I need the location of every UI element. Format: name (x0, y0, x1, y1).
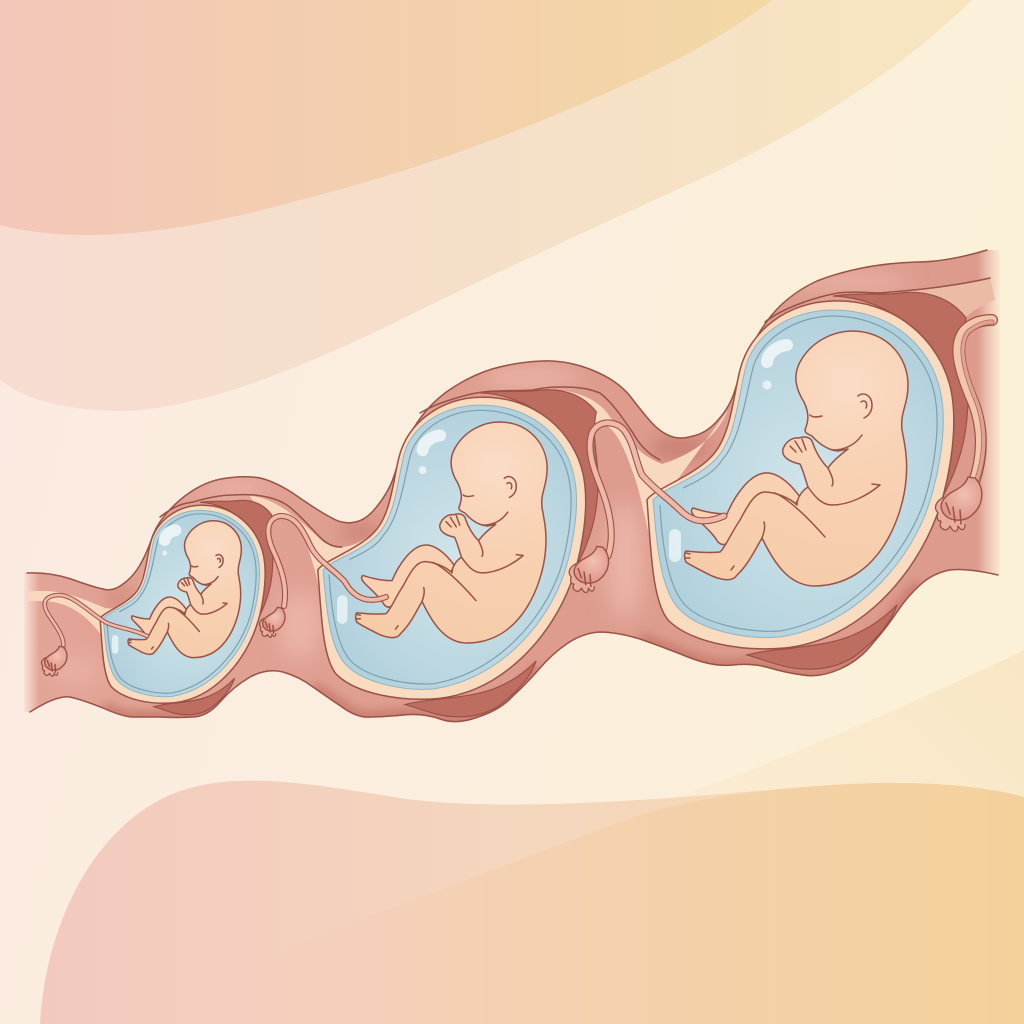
umbilical cord stage 1 to 2 (268, 516, 386, 606)
peach tract: left (27, 558, 150, 650)
placenta stage 3 (935, 477, 982, 531)
umbilical cord left (45, 595, 147, 648)
stage 1 amniotic sac (100, 500, 273, 715)
placenta stage 1 (260, 607, 285, 637)
uterus tissue band (24, 250, 1000, 722)
fetus stage 1 (128, 521, 241, 658)
tissue bottom outline (30, 570, 998, 722)
tissue top outline (27, 250, 987, 590)
umbilical cord stage 2 to 3 (590, 423, 724, 556)
placenta left (42, 646, 67, 676)
stage 2 amniotic sac (318, 390, 598, 717)
placenta stage 2 (569, 546, 609, 593)
inner wall line stage 3 (765, 278, 990, 322)
fetus stage 3 (684, 331, 908, 586)
inner wall line stage 1 (160, 495, 342, 547)
tissue shading (50, 275, 920, 722)
umbilical cord stage 3 right (958, 320, 992, 482)
peach tract: between stage 2 and 3 (520, 390, 728, 560)
top wave dark (0, 0, 772, 235)
bottom right light wave (640, 650, 1024, 1024)
peach tract: between stage 1 and 2 (250, 496, 378, 600)
inner wall line stage 2 (420, 387, 660, 460)
top wave light (0, 0, 972, 411)
fetus stage 2 (356, 422, 547, 643)
bottom inner wave (230, 783, 1024, 1024)
bottom wave (40, 781, 1024, 1024)
peach tract: right (885, 278, 995, 322)
stage 3 amniotic sac (647, 292, 968, 669)
